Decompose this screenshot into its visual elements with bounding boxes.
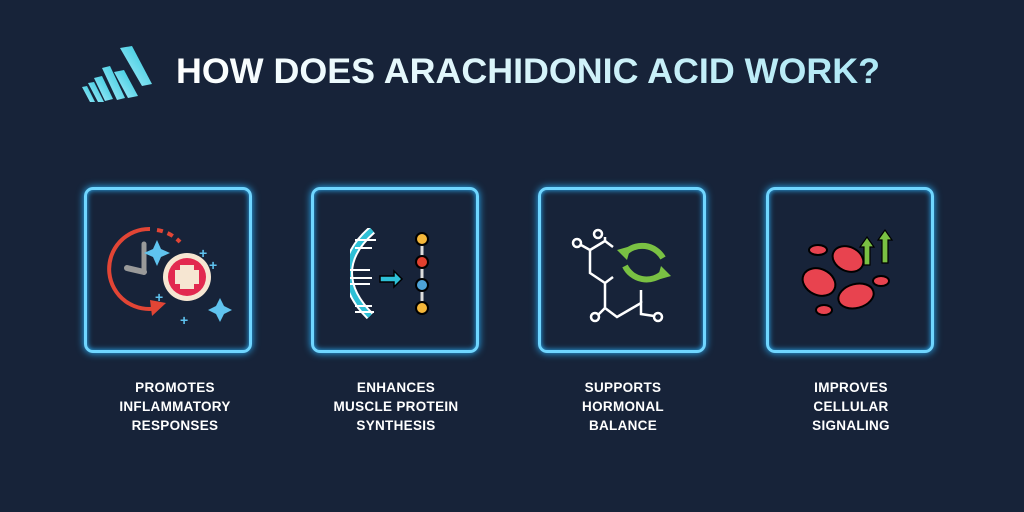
label: cellular xyxy=(812,380,890,433)
label: hormonal: HORMONAL xyxy=(582,399,664,414)
icon: DNA to protein xyxy=(350,228,429,320)
label: muscle protein: ENHANCES xyxy=(357,380,435,395)
label: cellular: CELLULAR xyxy=(813,399,889,414)
label: muscle protein xyxy=(334,380,458,433)
logo xyxy=(82,46,152,102)
label: cellular: IMPROVES xyxy=(814,380,888,395)
panel: muscle protein xyxy=(311,187,479,353)
panel: cellular xyxy=(766,187,934,353)
icon: clock with medical cross: + xyxy=(180,312,188,328)
icon: clock with medical cross: + xyxy=(155,289,163,305)
label: hormonal: SUPPORTS xyxy=(585,380,661,395)
label: hormonal: BALANCE xyxy=(589,418,657,433)
title: HOW DOES ARACHIDONIC ACID WORK? xyxy=(176,52,880,91)
icon: clock with medical cross: + xyxy=(199,245,207,261)
label: hormonal xyxy=(582,380,664,433)
panel: hormonal xyxy=(538,187,706,353)
icon: molecule with cycle arrows xyxy=(572,228,671,322)
label: inflammatory: RESPONSES xyxy=(132,418,218,433)
label: inflammatory: PROMOTES xyxy=(135,380,215,395)
label: inflammatory xyxy=(119,380,231,433)
icon: red blood cells with arrows xyxy=(802,229,893,316)
label: muscle protein: SYNTHESIS xyxy=(356,418,436,433)
label: cellular: SIGNALING xyxy=(812,418,890,433)
label: muscle protein: MUSCLE PROTEIN xyxy=(334,399,458,414)
label: inflammatory: INFLAMMATORY xyxy=(119,399,231,414)
icon: clock with medical cross xyxy=(107,227,232,328)
panel: inflammatory xyxy=(84,187,252,353)
icon: clock with medical cross: + xyxy=(209,257,217,273)
